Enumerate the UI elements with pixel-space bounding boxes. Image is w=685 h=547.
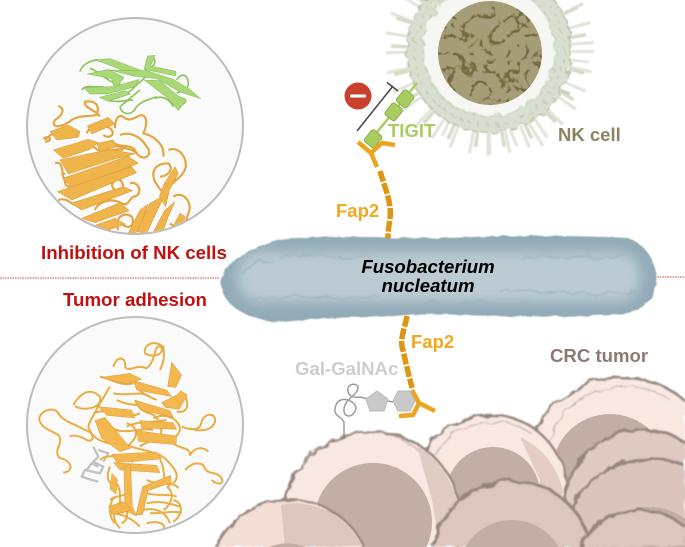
tumor cell lower middle bbox=[433, 481, 591, 547]
label: Fusobacterium nucleatum bbox=[361, 256, 495, 296]
panel: CRC tumor cells bbox=[216, 377, 685, 547]
orange loops bbox=[39, 343, 222, 530]
label: Gal-GalNAc: Gal-GalNAc bbox=[295, 358, 398, 379]
panel: adhesion structure circle bbox=[27, 317, 243, 533]
tumor cell middle bbox=[413, 415, 567, 547]
icon: inhibition bar bbox=[357, 82, 398, 131]
orange sheets bbox=[50, 117, 185, 235]
protein: Fap2 with ligand bbox=[39, 343, 222, 530]
divider: dotted red line bbox=[0, 277, 685, 278]
label: upper Fap2: Fap2 bbox=[336, 200, 379, 221]
label: NK cell: NK cell bbox=[558, 124, 621, 145]
orange sheets bbox=[95, 362, 187, 516]
tumor cell back right bbox=[527, 377, 685, 547]
tumor cell large left bbox=[283, 431, 461, 547]
tumor cell right stack bbox=[564, 430, 685, 547]
protein: Fap2 and TIGIT complex bbox=[43, 55, 201, 235]
tumor cell lower left bbox=[216, 500, 364, 547]
adhesin: upper Fap2 bbox=[358, 142, 395, 238]
label: TIGIT: TIGIT bbox=[388, 120, 436, 141]
label: lower Fap2: Fap2 bbox=[411, 331, 454, 352]
label: Tumor adhesion: Tumor adhesion bbox=[63, 289, 207, 310]
label: Inhibition of NK cells: Inhibition of NK cells bbox=[41, 242, 227, 263]
nucleus bbox=[438, 1, 542, 105]
green loops bbox=[80, 57, 188, 114]
label: Fusobacterium nucleatum: Fusobacterium bbox=[361, 256, 495, 277]
panel: NK cell bbox=[396, 0, 589, 156]
glycan: Gal-GalNAc chain bbox=[335, 384, 415, 436]
orange loops bbox=[43, 101, 190, 230]
green sheets bbox=[83, 55, 201, 111]
label: CRC tumor: CRC tumor bbox=[550, 345, 648, 366]
panel: inhibition structure circle bbox=[27, 18, 243, 235]
icon: minus sign bbox=[344, 82, 372, 110]
tumor cell lower right bbox=[580, 510, 685, 547]
receptor: TIGIT bbox=[363, 83, 417, 149]
panel: bacterium bbox=[221, 236, 656, 322]
adhesin: lower Fap2 bbox=[399, 316, 435, 416]
membrane bbox=[415, 0, 563, 124]
label: Fusobacterium nucleatum: nucleatum bbox=[382, 275, 474, 296]
ligand bbox=[82, 447, 108, 482]
spikes bbox=[396, 0, 589, 156]
